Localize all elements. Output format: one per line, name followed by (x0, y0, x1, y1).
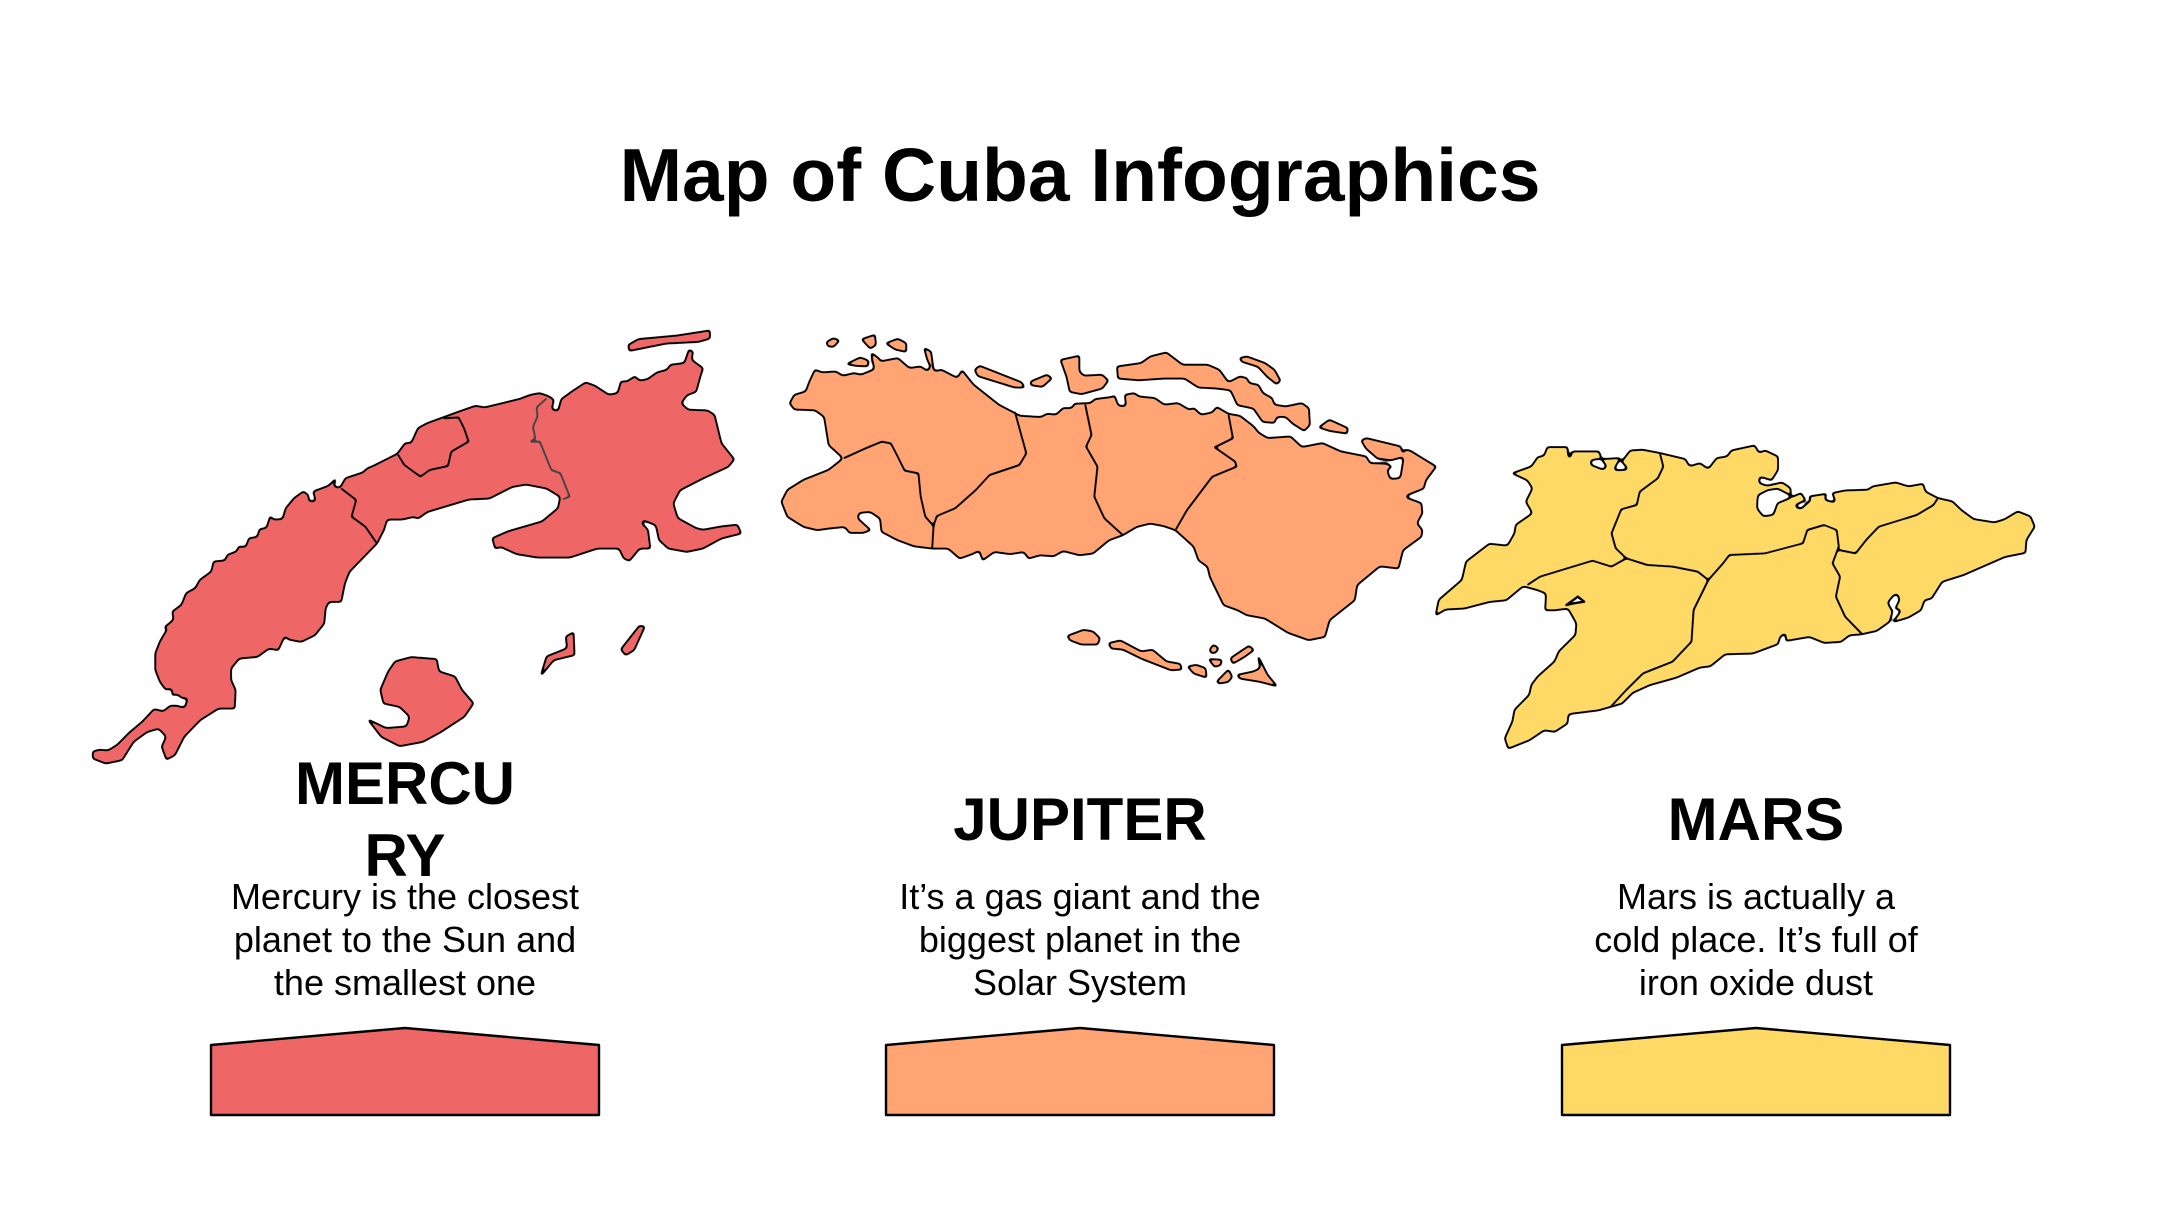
text: Jupiter description: biggest planet in the (919, 919, 1241, 960)
text: Mars description: cold place. It’s full of (1594, 919, 1918, 960)
text: Mercury description (231, 876, 579, 1003)
text: Mars description (1594, 876, 1918, 1003)
text: Jupiter description: Solar System (973, 962, 1187, 1003)
bay (1566, 597, 1584, 605)
base shape: Jupiter (886, 1028, 1274, 1115)
heading: Mercury: RY (364, 822, 446, 889)
province borders (844, 404, 1237, 548)
text: Mercury description: Mercury is the closest (231, 876, 579, 917)
map: eastern Cuba (Mars) (1436, 446, 2035, 748)
text: Mercury description: planet to the Sun and (234, 919, 576, 960)
text: Mars description: Mars is actually a (1617, 876, 1895, 917)
base shape: Mars (1562, 1028, 1950, 1115)
map: central Cuba (Jupiter) (782, 335, 1436, 686)
text: Mars description: iron oxide dust (1639, 962, 1873, 1003)
province borders (341, 398, 570, 543)
heading: Mercury (295, 750, 515, 889)
base shape: Mercury (211, 1028, 599, 1115)
heading: Mercury: MERCU (295, 750, 515, 817)
text: Mercury description: the smallest one (274, 962, 536, 1003)
heading: Mars: MARS (1668, 786, 1844, 853)
map: western Cuba (Mercury) (93, 331, 741, 763)
landmass and islands (782, 335, 1436, 686)
text: Jupiter description: It’s a gas giant and the (899, 876, 1261, 917)
title: Map of Cuba Infographics (620, 133, 1540, 217)
province borders (1527, 453, 1938, 707)
text: Jupiter description (899, 876, 1261, 1003)
landmass and islands (93, 331, 741, 763)
landmass (1436, 446, 2035, 748)
heading: Jupiter: JUPITER (953, 786, 1207, 853)
